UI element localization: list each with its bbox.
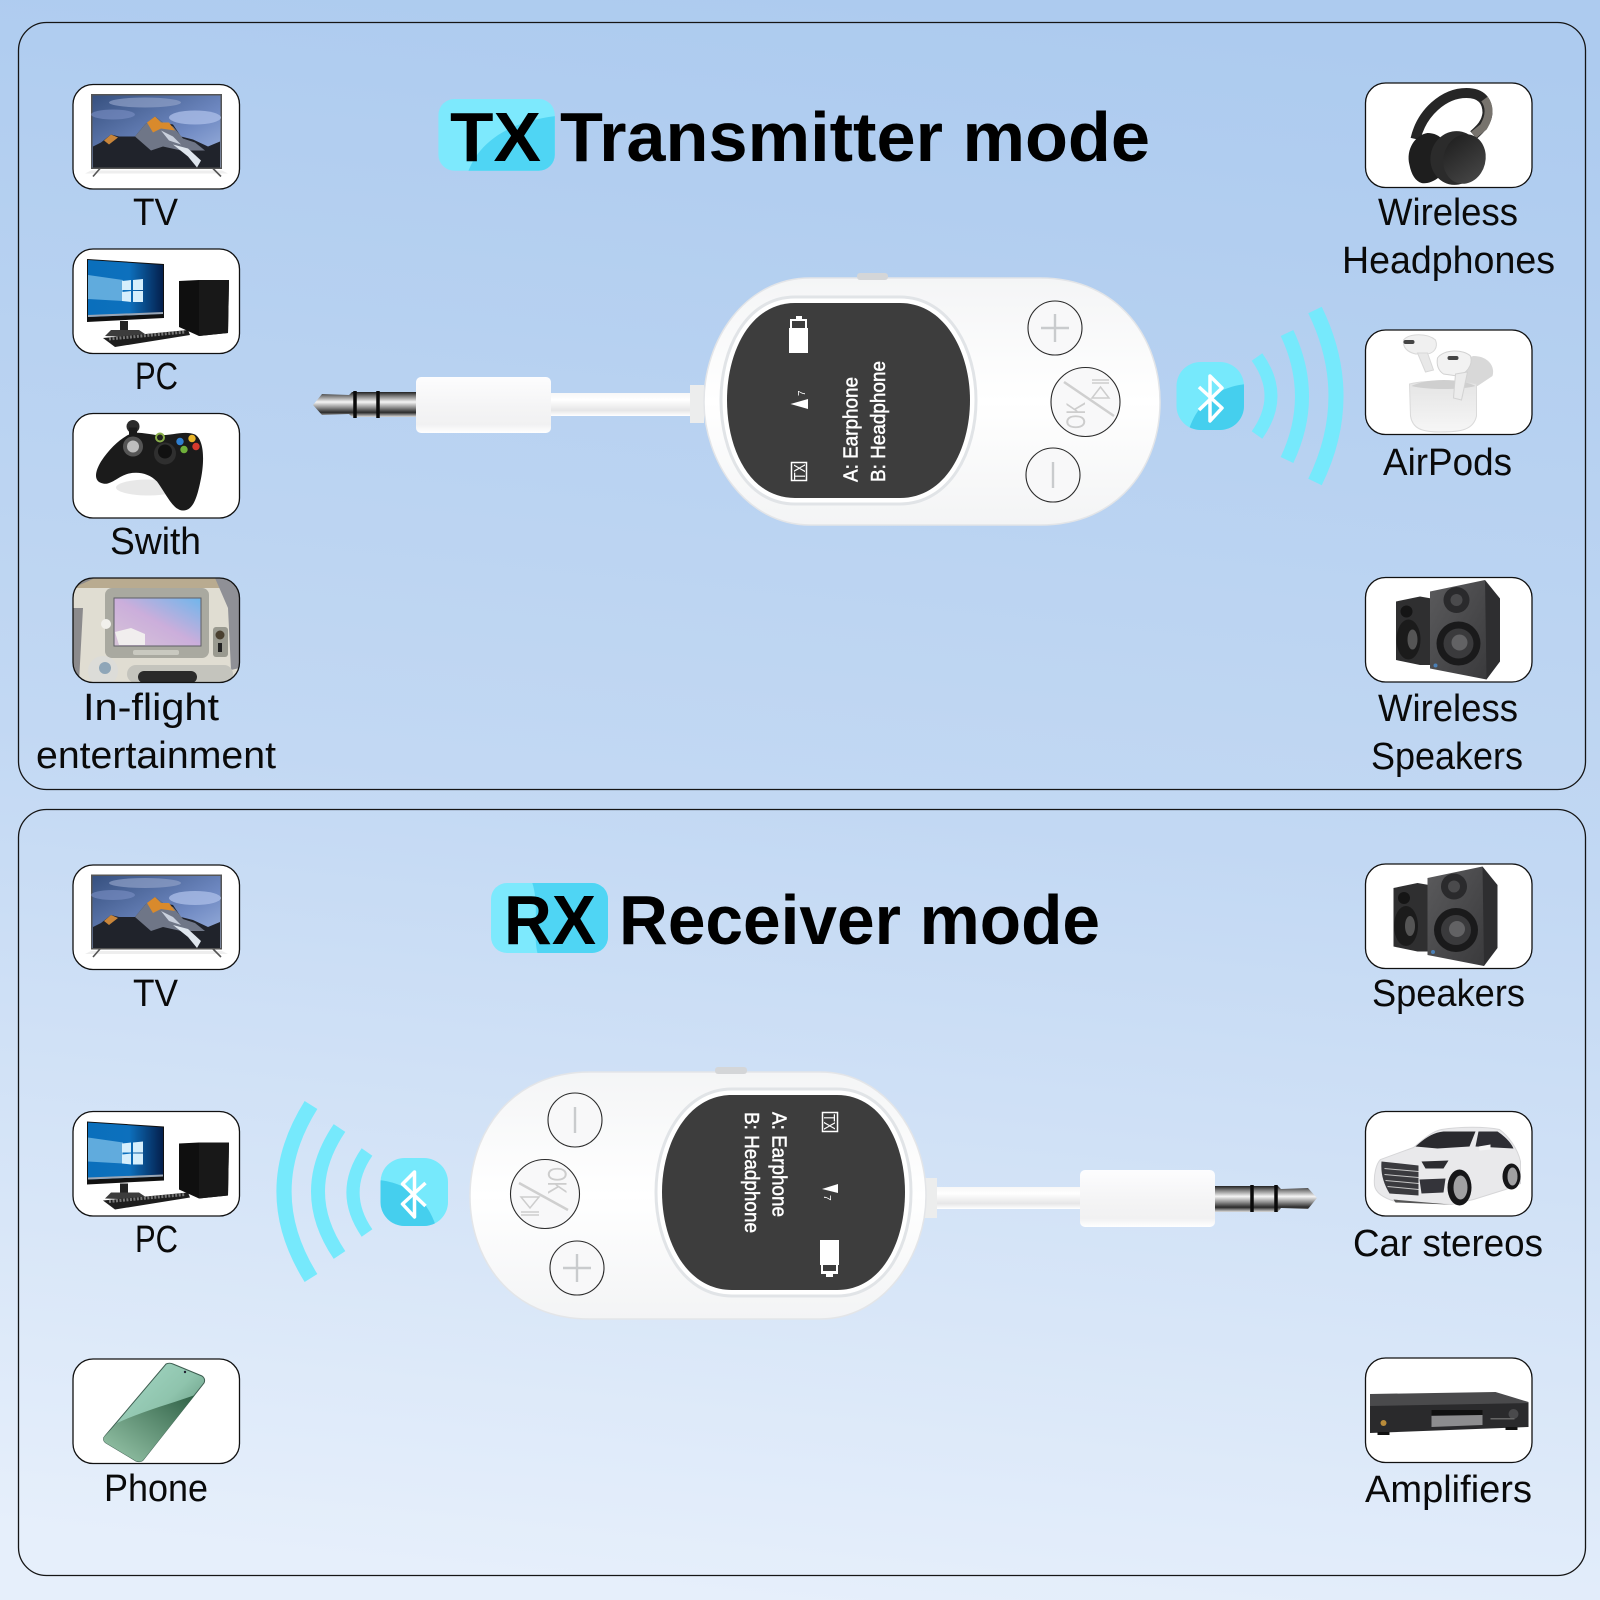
power button [857, 273, 888, 280]
label: Wireless Headphones [1342, 192, 1555, 282]
label: TV: TV [133, 973, 179, 1015]
device: receiver with audio jack [470, 1067, 1317, 1319]
source card: game controller [73, 414, 240, 563]
signal waves: receive [284, 1105, 367, 1278]
icon: bluetooth receiving [378, 1158, 448, 1228]
label: Car stereos: Car stereos [1353, 1223, 1543, 1265]
output card: wireless speakers [1366, 578, 1532, 778]
label: In-flight entertainment: In-flight [83, 687, 219, 729]
output card: car stereos [1353, 1112, 1543, 1265]
TX icon: TX [792, 464, 809, 480]
button: plus [1028, 301, 1082, 355]
button: minus [1026, 448, 1080, 502]
text: B Headphone: B: Headphone [740, 1112, 762, 1233]
speaker icon [790, 390, 808, 409]
screen [727, 303, 970, 498]
source card: PC [73, 249, 240, 398]
output card: amplifiers [1365, 1358, 1532, 1511]
label: PC: PC [135, 356, 178, 398]
body [704, 278, 1160, 525]
label: Speakers: Speakers [1372, 973, 1525, 1015]
device: transmitter with audio jack [313, 273, 1160, 525]
button: plus [550, 1241, 604, 1295]
title: TX Transmitter mode: Transmitter mode [560, 98, 1150, 176]
button: OK play: OK [1061, 402, 1091, 429]
audio jack and cable [313, 377, 704, 433]
power button [715, 1067, 747, 1074]
audio jack and cable [922, 1170, 1317, 1227]
source card: TV [73, 84, 240, 234]
label: AirPods: AirPods [1383, 442, 1512, 484]
speaker icon [821, 1184, 838, 1201]
battery icon [820, 1240, 839, 1277]
speaker icon: 7 [797, 390, 808, 396]
label: Phone: Phone [104, 1468, 208, 1510]
button: OK play [1051, 368, 1120, 436]
speaker icon: 7 [821, 1195, 832, 1201]
source card: in-flight entertainment [36, 578, 276, 777]
label: Wireless Speakers: Wireless [1378, 688, 1518, 730]
body [470, 1072, 926, 1319]
text: A Earphone: A: Earphone [768, 1112, 790, 1217]
label: Wireless Speakers: Speakers [1371, 736, 1523, 778]
signal waves: transmit [1257, 310, 1336, 482]
button: OK play: OK [542, 1167, 572, 1194]
source card: TV [73, 865, 240, 1015]
label: Amplifiers: Amplifiers [1365, 1469, 1532, 1511]
badge: RX: RX [504, 881, 596, 959]
output card: speakers [1366, 864, 1532, 1015]
label: Swith: Swith [110, 521, 201, 563]
label: Wireless Headphones: Headphones [1342, 240, 1555, 282]
output card: wireless headphones [1342, 83, 1555, 282]
button: OK play [510, 1160, 580, 1228]
label: Wireless Headphones: Wireless [1378, 192, 1518, 234]
label: In-flight entertainment [36, 687, 276, 777]
source card: PC [73, 1112, 240, 1261]
screen [662, 1095, 905, 1290]
output card: AirPods [1366, 330, 1532, 484]
TX icon: TX [820, 1114, 837, 1130]
text: B Headphone: B: Headphone [868, 361, 890, 482]
title: RX Receiver mode: Receiver mode [619, 881, 1100, 959]
text: A Earphone: A: Earphone [840, 377, 862, 482]
battery icon [789, 316, 808, 353]
panel: transmitter mode [18, 22, 1586, 790]
label: Wireless Speakers [1371, 688, 1523, 778]
label: In-flight entertainment: entertainment [36, 735, 276, 777]
panel: receiver mode [18, 810, 1586, 1576]
label: PC: PC [135, 1219, 178, 1261]
badge: TX: TX [450, 98, 541, 176]
source card: phone [73, 1359, 240, 1510]
button: minus [548, 1093, 602, 1147]
label: TV: TV [133, 192, 179, 234]
icon: bluetooth transmitting [1176, 362, 1246, 432]
